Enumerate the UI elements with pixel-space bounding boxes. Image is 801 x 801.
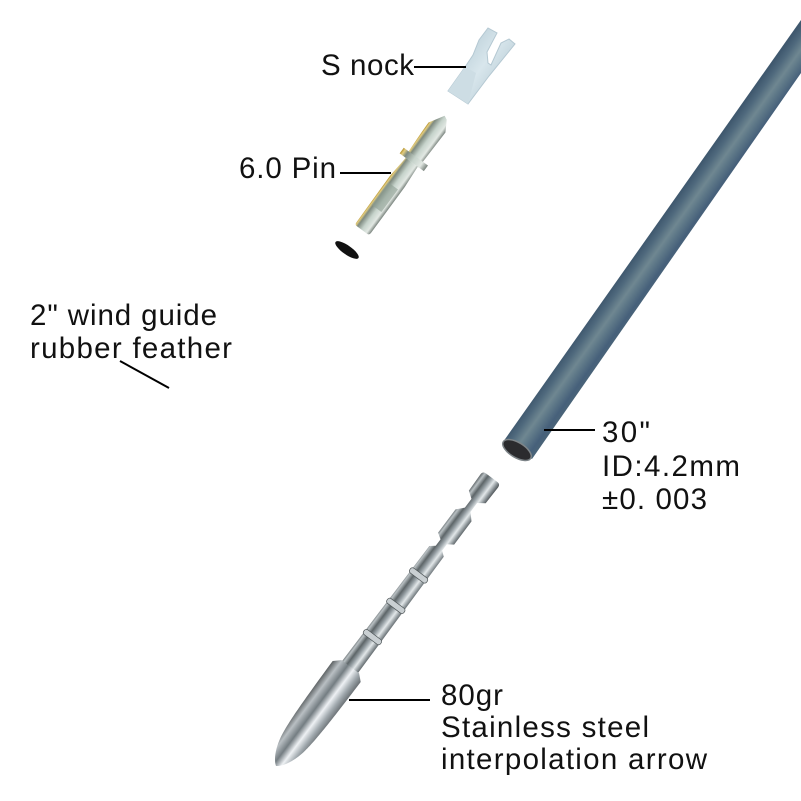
stainless steel point xyxy=(262,467,506,776)
label: S nock: S nock xyxy=(321,49,414,82)
carbon shaft xyxy=(499,20,801,465)
label: point spec: interpolation arrow xyxy=(441,743,708,776)
label: point spec: Stainless steel xyxy=(441,711,649,744)
label: rubber feather xyxy=(30,299,232,388)
head xyxy=(262,656,364,776)
label: shaft spec: 30" xyxy=(602,416,650,449)
label: point spec xyxy=(349,679,708,776)
black oval washer xyxy=(333,238,361,262)
pin xyxy=(350,107,458,239)
shaft xyxy=(338,471,500,678)
thread beads xyxy=(362,567,429,646)
label: rubber feather: 2" wind guide xyxy=(30,299,217,332)
label: shaft spec xyxy=(544,416,740,516)
label: point spec: 80gr xyxy=(441,679,503,712)
label: 6.0 Pin: 6.0 Pin xyxy=(239,152,336,185)
S nock xyxy=(448,28,515,104)
label: shaft spec: ±0. 003 xyxy=(602,483,707,516)
label: rubber feather: rubber feather xyxy=(30,332,232,365)
label: shaft spec: ID:4.2mm xyxy=(602,450,740,483)
